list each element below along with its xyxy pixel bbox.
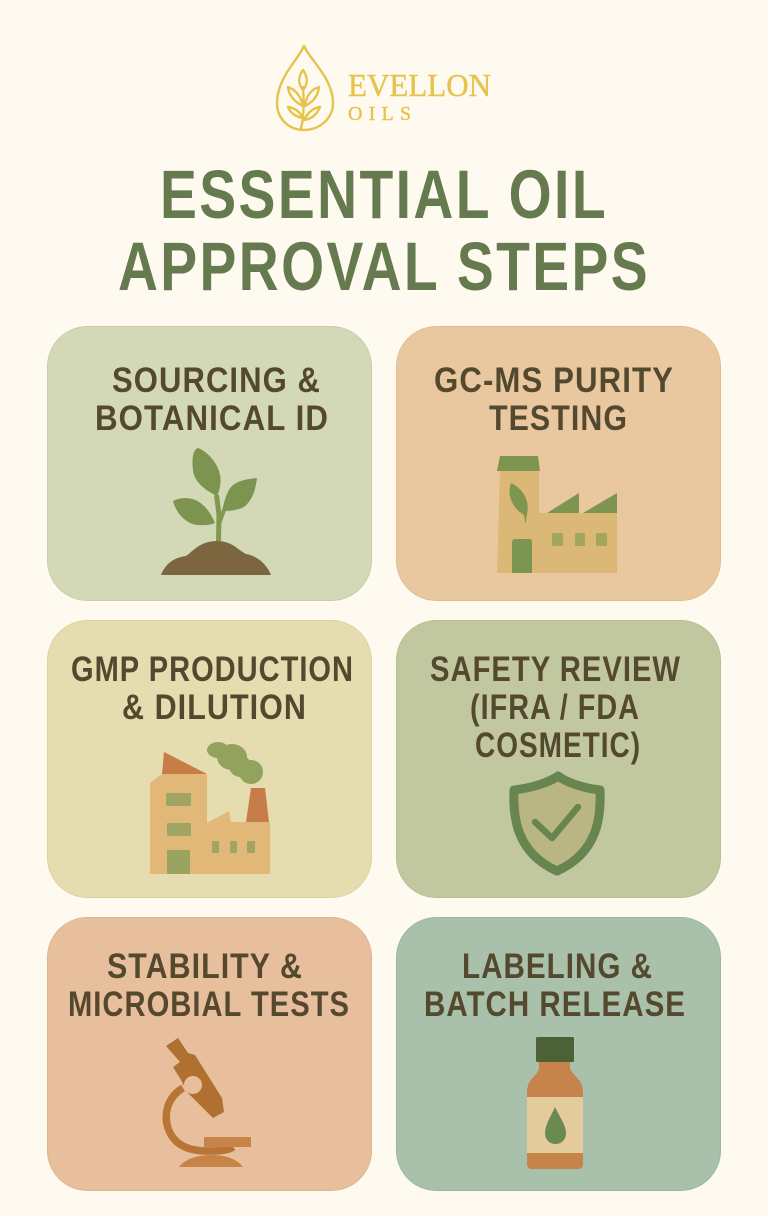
- heading: sourcing: BOTANICAL ID: [95, 399, 329, 438]
- heading: labeling: [424, 947, 686, 1024]
- heading: safety review: COSMETIC): [475, 726, 641, 765]
- icon: factory with smoke: [150, 742, 270, 874]
- heading: sourcing: SOURCING &: [112, 361, 321, 400]
- card background: [396, 326, 720, 600]
- heading: sourcing: [95, 361, 329, 438]
- title line 1: ESSENTIAL OIL: [160, 156, 608, 233]
- panel: GMP production and dilution: [48, 620, 372, 898]
- panel: GC-MS purity testing: [396, 326, 720, 600]
- icon: factory with leaf: [497, 456, 617, 573]
- heading: GMP: & DILUTION: [122, 688, 307, 727]
- card background: [48, 326, 372, 600]
- heading: labeling: LABELING &: [462, 947, 653, 986]
- heading: GMP: GMP PRODUCTION: [71, 650, 354, 689]
- logo: Evellon Oils: [277, 46, 491, 130]
- panel: labeling and batch release: [396, 918, 720, 1190]
- heading: stability: STABILITY &: [107, 947, 303, 986]
- card background: [48, 918, 372, 1190]
- heading: GC-MS: TESTING: [489, 399, 628, 438]
- title: [118, 156, 650, 305]
- logo wordmark: EVELLON: [348, 67, 491, 103]
- heading: safety review: SAFETY REVIEW: [430, 650, 681, 689]
- panel: stability and microbial tests: [48, 918, 372, 1190]
- icon: dropper bottle: [527, 1037, 583, 1169]
- logo subtitle: OILS: [348, 103, 411, 125]
- heading: GMP: [71, 650, 354, 727]
- panel: sourcing and botanical ID: [48, 326, 372, 600]
- heading: stability: MICROBIAL TESTS: [68, 985, 350, 1024]
- heading: labeling: BATCH RELEASE: [424, 985, 686, 1024]
- heading: safety review: (IFRA / FDA: [470, 688, 640, 727]
- icon: microscope: [166, 1038, 251, 1167]
- card background: [396, 918, 720, 1190]
- icon: shield with check: [514, 776, 600, 871]
- icon: oil drop with sprig: [277, 46, 333, 130]
- panel: safety review: [396, 620, 720, 898]
- card background: [48, 620, 372, 898]
- heading: GC-MS: [434, 361, 674, 438]
- card background: [396, 620, 720, 898]
- title line 2: APPROVAL STEPS: [118, 228, 650, 305]
- heading: stability: [68, 947, 350, 1024]
- heading: GC-MS: GC-MS PURITY: [434, 361, 674, 400]
- icon: seedling in soil: [161, 448, 271, 575]
- heading: safety review: [430, 650, 681, 765]
